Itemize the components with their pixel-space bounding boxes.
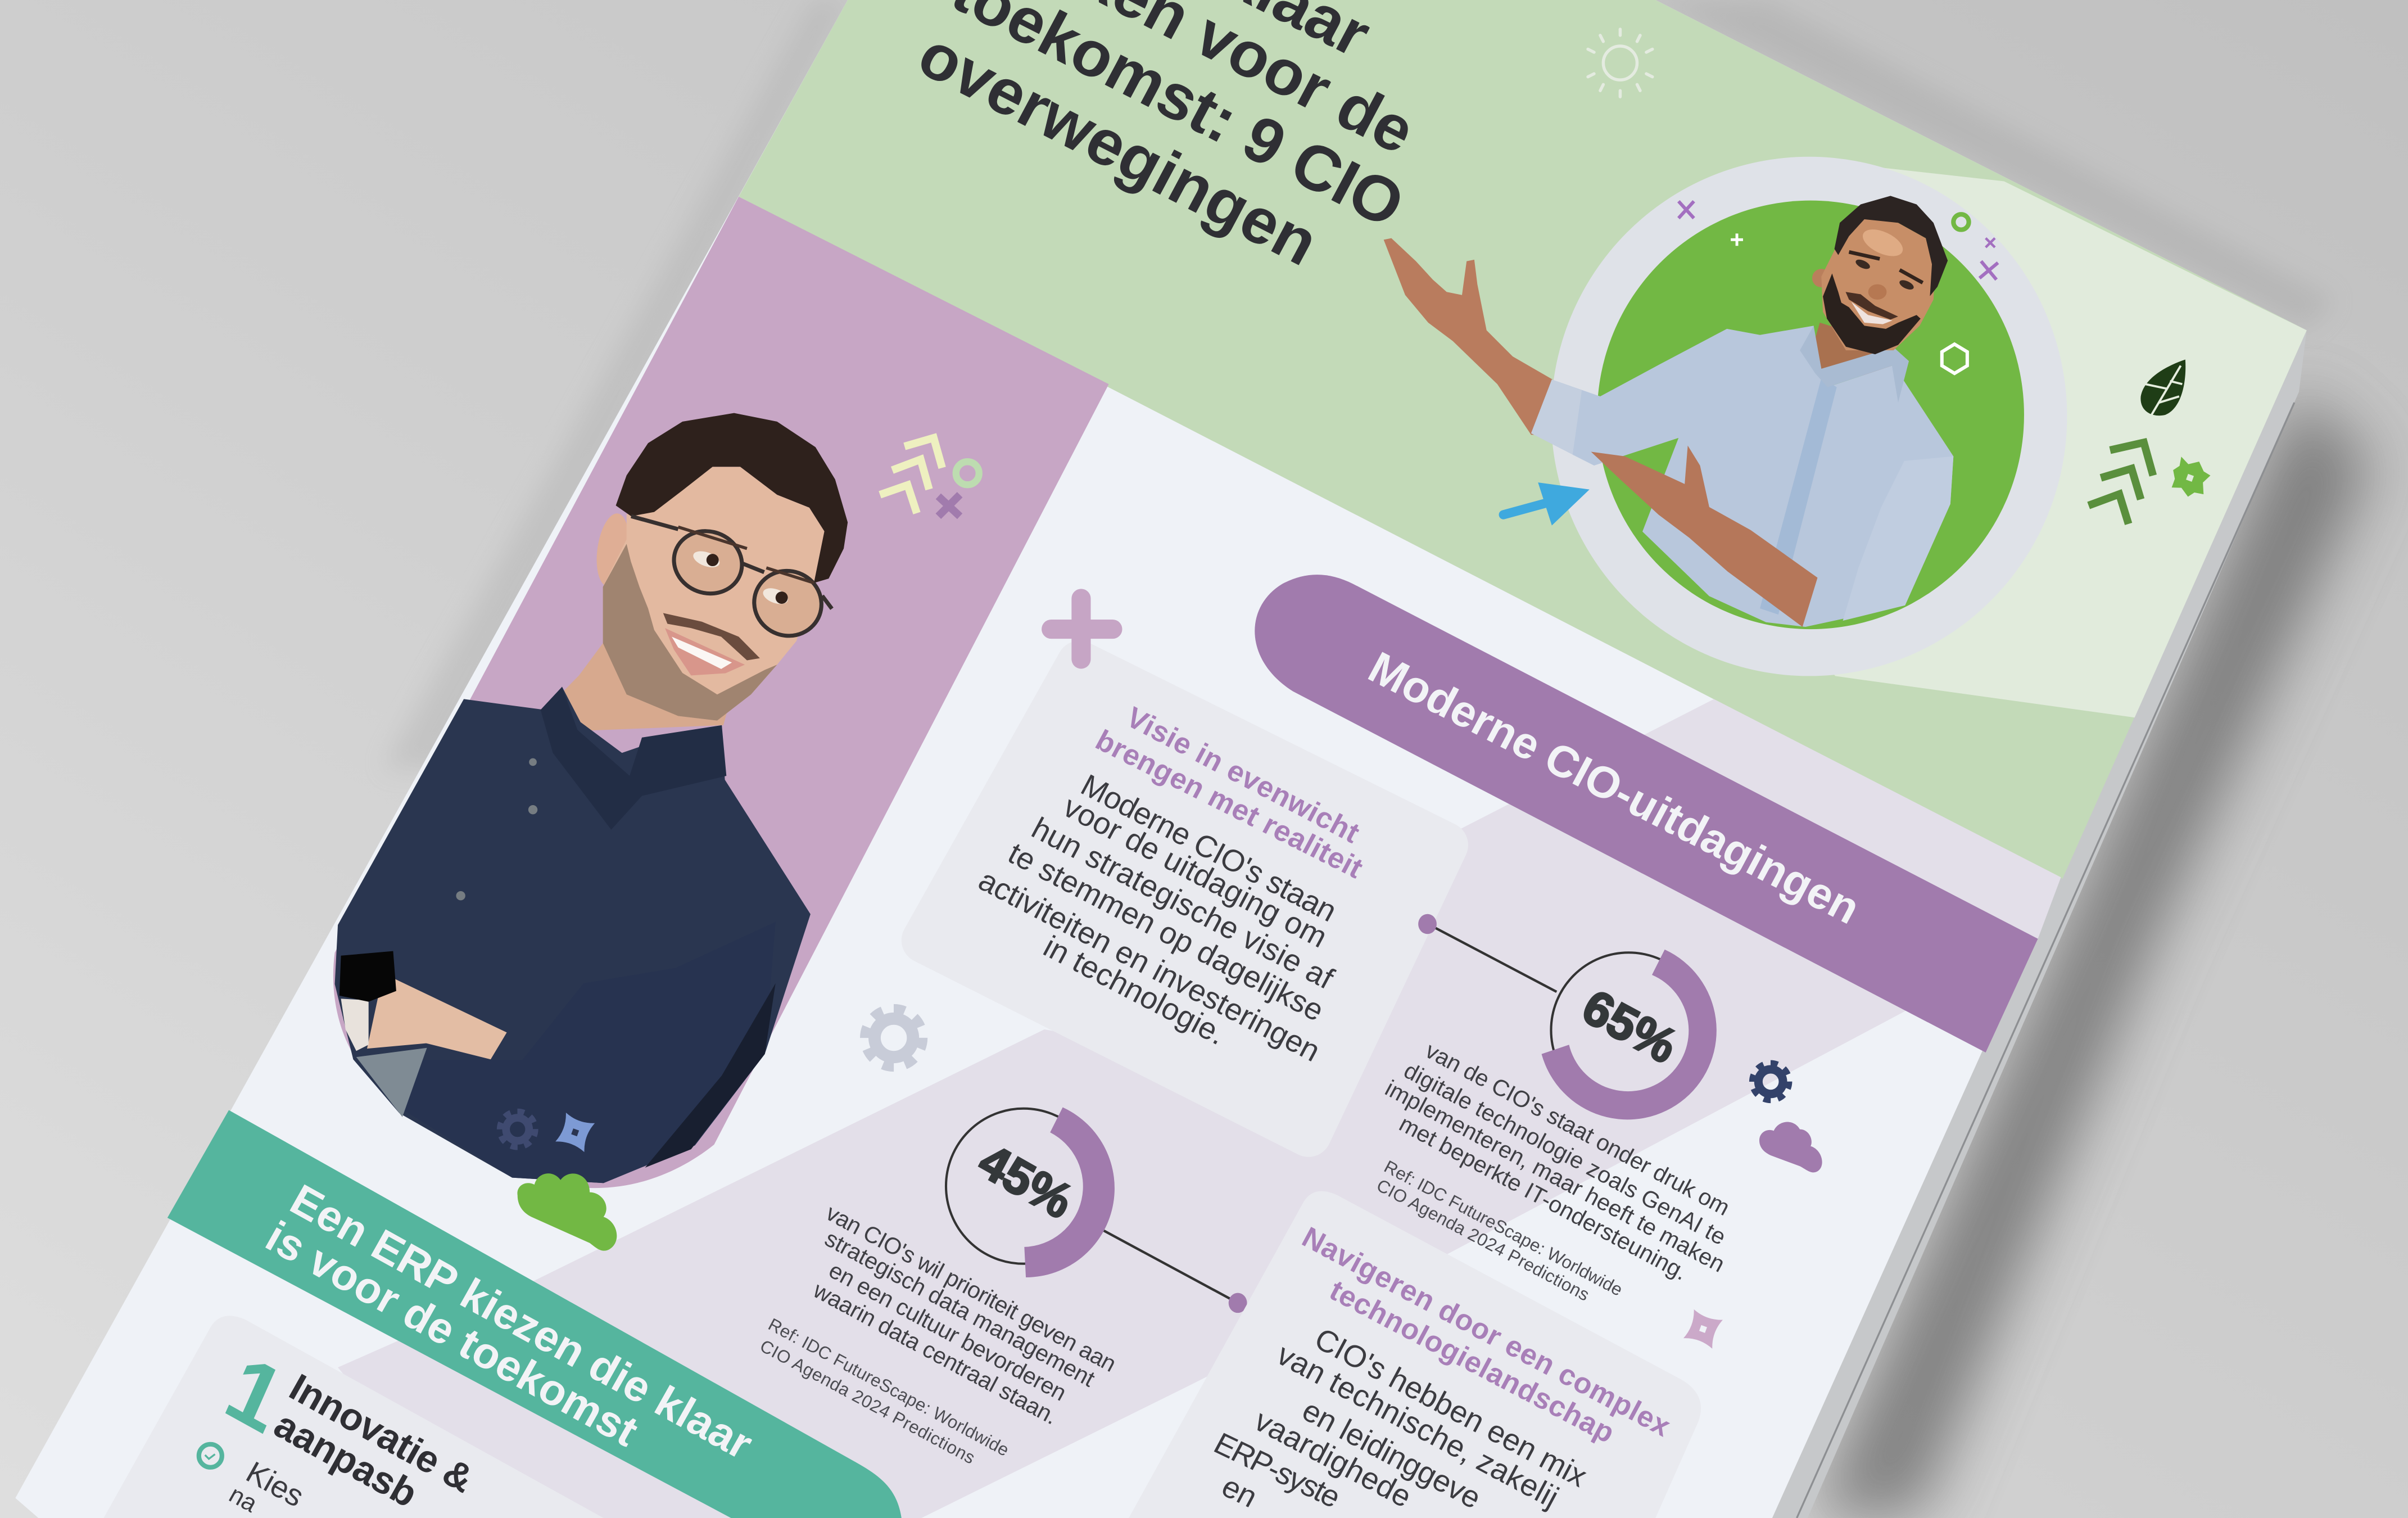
text: 45% statistic: en een cultuur bevorderen (825, 1257, 1071, 1406)
card body text: ERP-syste (1208, 1426, 1346, 1515)
icon: green badge (2166, 454, 2214, 502)
card heading: Innovatie & (282, 1366, 481, 1501)
text: 45% statistic: strategisch data management (821, 1225, 1099, 1392)
text: 45% statistic (757, 1199, 1120, 1468)
text: 65% statistic: implementeren, maar heeft te maken (1381, 1075, 1729, 1277)
card body text: hun strategische visie af (1026, 811, 1339, 996)
portrait: presenting man (1384, 196, 1953, 627)
icon: plus (1051, 598, 1112, 659)
text: 45% statistic: waarin data centraal staan. (809, 1277, 1062, 1430)
chart: 65% donut: 65% (1574, 979, 1686, 1074)
card body text: en leidinggeve (1297, 1393, 1487, 1515)
panel: teal ERP banner (168, 1110, 902, 1518)
icon: purple cloud (1759, 1122, 1822, 1172)
panel: portrait ring (1551, 157, 2067, 676)
card body text: na (224, 1480, 262, 1518)
number one: 1 (212, 1336, 298, 1453)
icon: gears and badge on shirt (500, 1112, 595, 1152)
card body text: en (1216, 1469, 1263, 1514)
icon: gray gear (864, 1009, 923, 1067)
card body text: Kies (241, 1455, 310, 1514)
chart: 65% donut (1418, 914, 1717, 1119)
icon: green chevrons (2089, 442, 2153, 524)
page stack edge (1772, 331, 2307, 1518)
icon: navy gear (1752, 1063, 1789, 1100)
panel: challenges banner (1255, 575, 2038, 1052)
card heading: brengen met realiteit (1090, 724, 1368, 884)
icon: mauve badge (1683, 1309, 1723, 1349)
text: 45% statistic: CIO Agenda 2024 Predictions (757, 1336, 978, 1468)
panel: purple portrait background (333, 197, 1109, 1188)
icon: leaf (2140, 359, 2185, 415)
card body text: Moderne CIO's staan (1075, 767, 1342, 928)
text: 45% statistic: van CIO's wil prioriteit geven aan (822, 1199, 1120, 1377)
icon: cream chevrons (880, 438, 942, 513)
title: overwegingen (907, 18, 1329, 279)
card body text: CIO's hebben een mix (1309, 1321, 1592, 1494)
text: 65% statistic: CIO Agenda 2024 Predictions (1373, 1176, 1592, 1305)
text: 65% statistic: digitale technologie zoals GenAI te (1400, 1057, 1730, 1250)
card body text: in technologie. (1038, 929, 1231, 1051)
icon: green cloud (517, 1173, 617, 1251)
chart: 45% donut (946, 1108, 1247, 1313)
card body text (1208, 1321, 1592, 1515)
card heading: Navigeren door een complex (1297, 1221, 1676, 1443)
card body text: activiteiten en investeringen (973, 862, 1325, 1068)
text: 65% statistic: van de CIO's staat onder druk om (1421, 1037, 1734, 1221)
icon: ring and cross (938, 462, 979, 516)
icon: check circle (199, 1444, 222, 1467)
panel: vision card (925, 664, 1445, 1134)
panel: technology landscape card (1129, 1191, 1701, 1518)
text: 65% statistic: Ref: IDC FutureScape: Worldwide (1381, 1156, 1626, 1300)
card body text: voor de uitdaging om (1058, 789, 1333, 954)
green header panel (739, 0, 2307, 879)
lavender background shape (338, 699, 2061, 1518)
card body text (973, 767, 1342, 1068)
banner heading: Een ERP kiezen die klaar (283, 1176, 761, 1469)
portrait: man with glasses (335, 413, 848, 1183)
card heading: Visie in evenwicht (1121, 701, 1365, 849)
chart: 45% donut: 45% (970, 1133, 1081, 1230)
light green header wedge (1689, 166, 2307, 717)
card heading: aanpasb (267, 1403, 424, 1516)
icon: sun (1588, 29, 1653, 97)
card heading: technologielandschap (1324, 1273, 1620, 1449)
panel: innovation card (103, 1316, 604, 1518)
text: 45% statistic: Ref: IDC FutureScape: Worldwide (765, 1314, 1012, 1460)
card body text: te stemmen op dagelijkse (1003, 836, 1329, 1028)
icon: blue arrow (1504, 482, 1590, 526)
text: 65% statistic: met beperkte IT-ondersteuning. (1395, 1110, 1692, 1285)
banner heading: Moderne CIO-uitdagingen (1361, 642, 1868, 933)
banner heading: is voor de toekomst (258, 1212, 646, 1456)
card body text: vaardighede (1249, 1403, 1417, 1514)
card body text: van technische, zakelij (1271, 1337, 1564, 1515)
icon: ring and sparkle marks (1678, 201, 1998, 373)
